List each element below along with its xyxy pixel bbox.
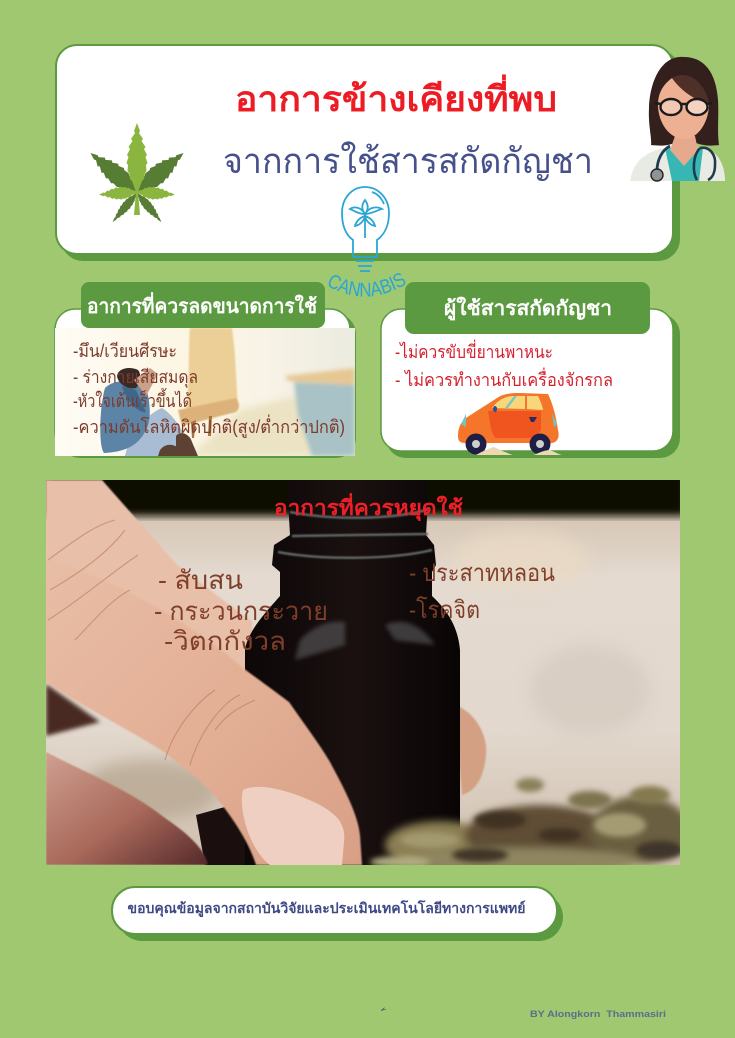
text block: reduce dose symptoms: - ร่างกายเสียสมดุล — [73, 367, 198, 388]
text block: reduce dose symptoms: -มึน/เวียนศีรษะ — [73, 341, 177, 361]
icon: doctor — [630, 57, 725, 181]
panel: source credit: ขอบคุณข้อมูลจากสถาบันวิจัยและประเมินเทคโนโลยีทางการแพทย์ — [128, 899, 526, 917]
icon: orange car — [458, 393, 562, 455]
text block: reduce dose symptoms: -ความดันโลหิตผิดปกติ(สูง/ต่ำกว่าปกติ) — [73, 414, 345, 438]
panel: source credit — [112, 887, 563, 941]
icon label: CANNABIS arc text: CANNABIS — [328, 273, 406, 297]
blurred highlights — [80, 530, 650, 820]
panel header: cannabis users — [405, 282, 650, 334]
thumb behind bottle — [460, 706, 487, 796]
panel header: reduce dose: อาการที่ควรลดขนาดการใช้ — [87, 291, 317, 318]
text block: reduce dose symptoms: -หัวใจเต้นเร็วขึ้นได้ — [73, 388, 192, 411]
icon: cannabis leaf — [84, 123, 190, 225]
dark background band — [46, 480, 680, 521]
heading: stop-use symptoms: อาการที่ควรหยุดใช้ — [274, 492, 463, 522]
chair — [178, 328, 239, 438]
man — [100, 368, 198, 456]
text block: stop-use symptoms left: - สับสน — [158, 565, 243, 595]
text block: stop-use symptoms left — [154, 565, 328, 656]
text block: user warnings — [395, 339, 613, 390]
author credit: BY Alongkorn Thammasiri — [530, 1009, 666, 1020]
lower finger — [46, 752, 208, 865]
panel header: cannabis users: ผู้ใช้สารสกัดกัญชา — [444, 296, 612, 322]
icon: cannabis light bulb — [342, 187, 389, 271]
small mark — [381, 1007, 387, 1011]
title: main heading: อาการข้างเคียงที่พบ — [235, 74, 557, 119]
photo: man sitting on floor — [55, 328, 355, 456]
title: subheading: จากการใช้สารสกัดกัญชา — [223, 141, 593, 181]
photo panel: oil bottle and hand — [46, 470, 690, 876]
bottle — [245, 470, 460, 865]
text block: stop-use symptoms left: -วิตกกังวล — [164, 626, 286, 656]
text block: user warnings: - ไม่ควรทำงานกับเครื่องจักรกล — [395, 367, 613, 390]
main finger — [46, 560, 362, 865]
text block: stop-use symptoms right: - ประสาทหลอน — [409, 560, 555, 587]
panel: title card — [56, 45, 680, 261]
text block: stop-use symptoms right — [409, 560, 555, 624]
rear finger — [46, 480, 252, 700]
dark gap between fingers — [196, 807, 245, 865]
dark wedge under finger — [46, 684, 100, 736]
cannabis bud — [370, 778, 690, 876]
text block: stop-use symptoms left: - กระวนกระวาย — [154, 596, 328, 626]
finger creases — [48, 520, 255, 765]
desk — [285, 368, 355, 456]
icon label: CANNABIS arc text — [328, 273, 406, 297]
text block: stop-use symptoms right: -โรคจิต — [409, 596, 480, 624]
text block: user warnings: -ไม่ควรขับขี่ยานพาหนะ — [395, 339, 553, 362]
fingernail — [242, 787, 344, 865]
panel: reduce dose — [55, 309, 356, 458]
text block: reduce dose symptoms — [73, 341, 345, 438]
panel header: reduce dose — [81, 282, 325, 328]
panel: cannabis users — [381, 309, 680, 458]
